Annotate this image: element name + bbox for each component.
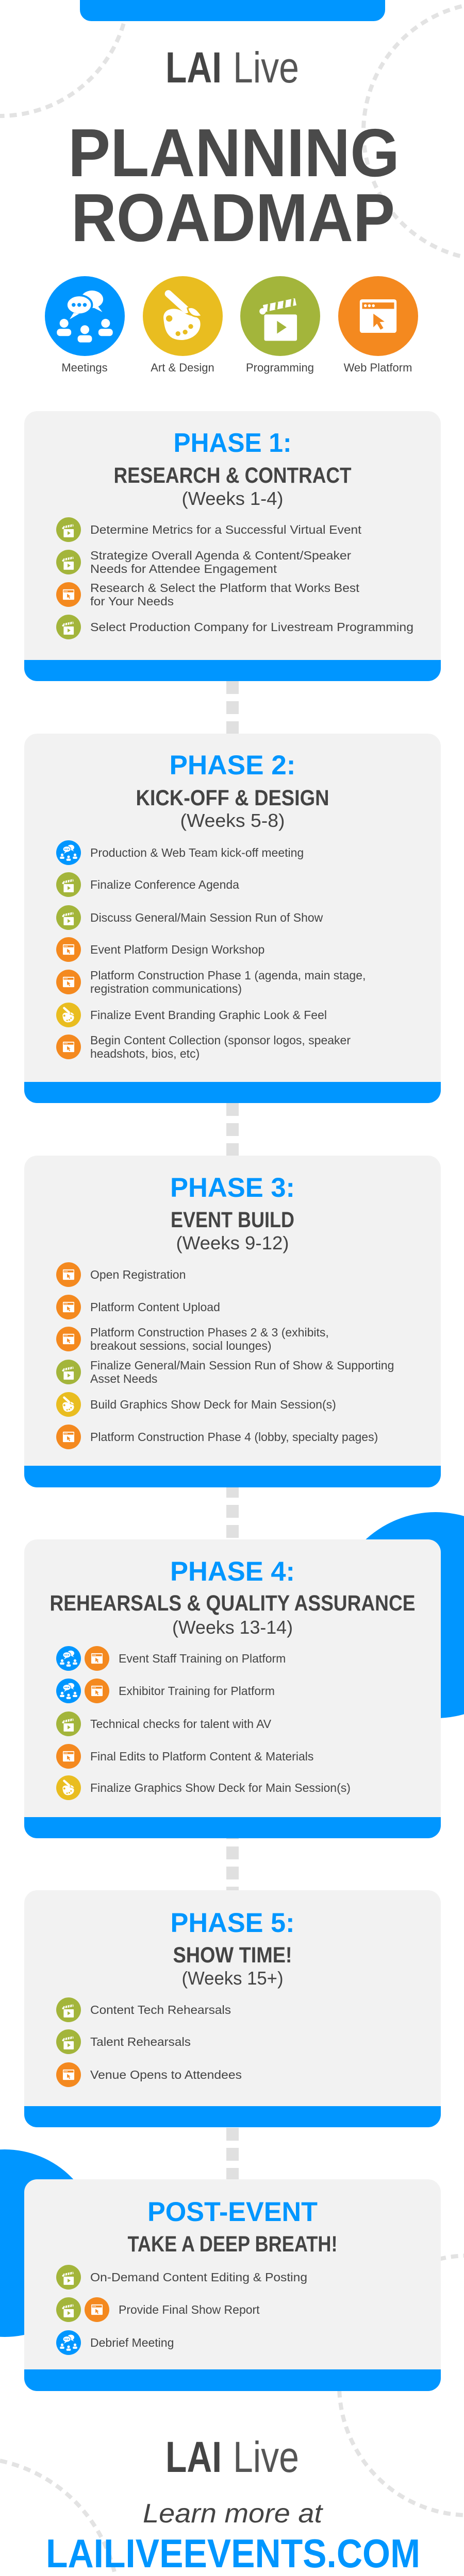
panel: phase 1: Select Production Company for Livestream Programming <box>90 620 413 634</box>
panel: phase 4: PHASE 4: <box>170 1556 295 1587</box>
logo: LAI Live (header) <box>165 43 299 92</box>
panel: post-event <box>24 2179 441 2391</box>
panel: phase 3: Platform Construction Phases 2 & 3 (exhibits, <box>90 1326 329 1339</box>
panel: phase 2: registration communications) <box>90 982 242 995</box>
panel: phase 3: Platform Content Upload <box>90 1300 220 1314</box>
panel: phase 5: PHASE 5: <box>170 1908 295 1938</box>
panel: phase 1: for Your Needs <box>90 595 174 608</box>
panel: post-event: POST-EVENT <box>147 2197 318 2227</box>
panel: phase 2: Discuss General/Main Session Run of Show <box>90 911 323 924</box>
call to action: LAILIVEEVENTS.COM <box>46 2531 420 2576</box>
panel: phase 1: Research & Select the Platform that Works Best <box>90 581 360 595</box>
logo: LAI Live (footer) <box>165 2433 299 2481</box>
title: ROADMAP <box>71 180 395 256</box>
panel: phase 1: PHASE 1: <box>173 428 292 458</box>
panel: phase 4 <box>24 1539 441 1838</box>
panel: post-event: Provide Final Show Report <box>119 2303 260 2316</box>
panel: phase 5: Content Tech Rehearsals <box>90 2003 231 2016</box>
panel: phase 2: Finalize Conference Agenda <box>90 878 239 891</box>
panel: phase 4: (Weeks 13-14) <box>172 1617 293 1638</box>
icon: meetings: Meetings <box>61 361 108 374</box>
panel: post-event: TAKE A DEEP BREATH! <box>128 2232 337 2257</box>
panel: phase 5: SHOW TIME! <box>173 1943 292 1968</box>
icon: art & design: Art & Design <box>151 361 214 374</box>
panel: phase 3: Open Registration <box>90 1268 186 1281</box>
panel: phase 2: KICK-OFF & DESIGN <box>136 786 329 810</box>
panel: phase 3: EVENT BUILD <box>171 1208 294 1232</box>
panel: phase 2: Production & Web Team kick-off meeting <box>90 846 304 859</box>
panel: post-event: On-Demand Content Editing & Posting <box>90 2270 307 2284</box>
decorative blue circles <box>0 1512 464 2337</box>
panel: phase 4: Exhibitor Training for Platform <box>119 1684 275 1698</box>
panel: phase 3: Asset Needs <box>90 1372 157 1385</box>
panel: phase 3: PHASE 3: <box>170 1173 295 1203</box>
panel: phase 4: Finalize Graphics Show Deck for Main Session(s) <box>90 1781 351 1794</box>
logo: LAI Live (header): LAI <box>165 43 222 92</box>
panel: phase 2: Platform Construction Phase 1 (agenda, main stage, <box>90 969 366 982</box>
panel: phase 2 <box>24 734 441 1103</box>
panel: phase 2: Finalize Event Branding Graphic Look & Feel <box>90 1008 327 1022</box>
panel: phase 4: Final Edits to Platform Content & Materials <box>90 1750 313 1763</box>
dashed connector between phases <box>226 681 239 2179</box>
panel: phase 2: PHASE 2: <box>169 750 296 781</box>
panel: phase 4: REHEARSALS & QUALITY ASSURANCE <box>49 1591 416 1616</box>
logo: LAI Live (footer): Live <box>233 2433 299 2481</box>
panel: phase 4: Technical checks for talent with AV <box>90 1717 272 1731</box>
panel: phase 5: (Weeks 15+) <box>181 1968 284 1989</box>
panel: phase 2: headshots, bios, etc) <box>90 1047 200 1060</box>
panel: phase 1: Needs for Attendee Engagement <box>90 562 277 575</box>
panel: phase 5 <box>24 1890 441 2127</box>
panel: phase 5: Talent Rehearsals <box>90 2035 191 2048</box>
icon: programming <box>240 276 320 374</box>
panel: phase 2: Event Platform Design Workshop <box>90 943 264 956</box>
panel: post-event: Debrief Meeting <box>90 2336 174 2349</box>
panel: phase 1: (Weeks 1-4) <box>181 488 284 509</box>
title <box>68 115 400 256</box>
panel: phase 3 <box>24 1156 441 1487</box>
category legend icons <box>45 276 418 374</box>
call to action: Learn more at <box>143 2499 324 2529</box>
panel: phase 1: Strategize Overall Agenda & Content/Speaker <box>90 549 351 562</box>
panel: phase 1 <box>24 411 441 681</box>
top blue tab <box>80 0 385 21</box>
panel: phase 1: Determine Metrics for a Successful Virtual Event <box>90 523 362 536</box>
logo: LAI Live (footer): LAI <box>165 2433 222 2481</box>
panel: phase 3: (Weeks 9-12) <box>176 1232 289 1253</box>
icon: programming: Programming <box>246 361 314 374</box>
logo: LAI Live (header): Live <box>233 43 299 92</box>
title: PLANNING <box>68 115 400 191</box>
panel: phase 3: Finalize General/Main Session Run of Show & Supporting <box>90 1359 394 1372</box>
icon: web platform <box>338 276 418 374</box>
panel: phase 2: (Weeks 5-8) <box>180 810 285 831</box>
icon: web platform: Web Platform <box>344 361 412 374</box>
panel: phase 3: Platform Construction Phase 4 (lobby, specialty pages) <box>90 1430 378 1444</box>
panel: phase 5: Venue Opens to Attendees <box>90 2068 242 2081</box>
panel: phase 3: breakout sessions, social lounges) <box>90 1339 272 1352</box>
icon: art & design <box>143 276 223 374</box>
call to action <box>46 2499 420 2576</box>
panel: phase 2: Begin Content Collection (sponsor logos, speaker <box>90 1033 351 1047</box>
panel: phase 3: Build Graphics Show Deck for Main Session(s) <box>90 1398 336 1411</box>
panel: phase 4: Event Staff Training on Platform <box>119 1652 286 1665</box>
icon: meetings <box>45 276 125 374</box>
panel: phase 1: RESEARCH & CONTRACT <box>113 463 352 488</box>
